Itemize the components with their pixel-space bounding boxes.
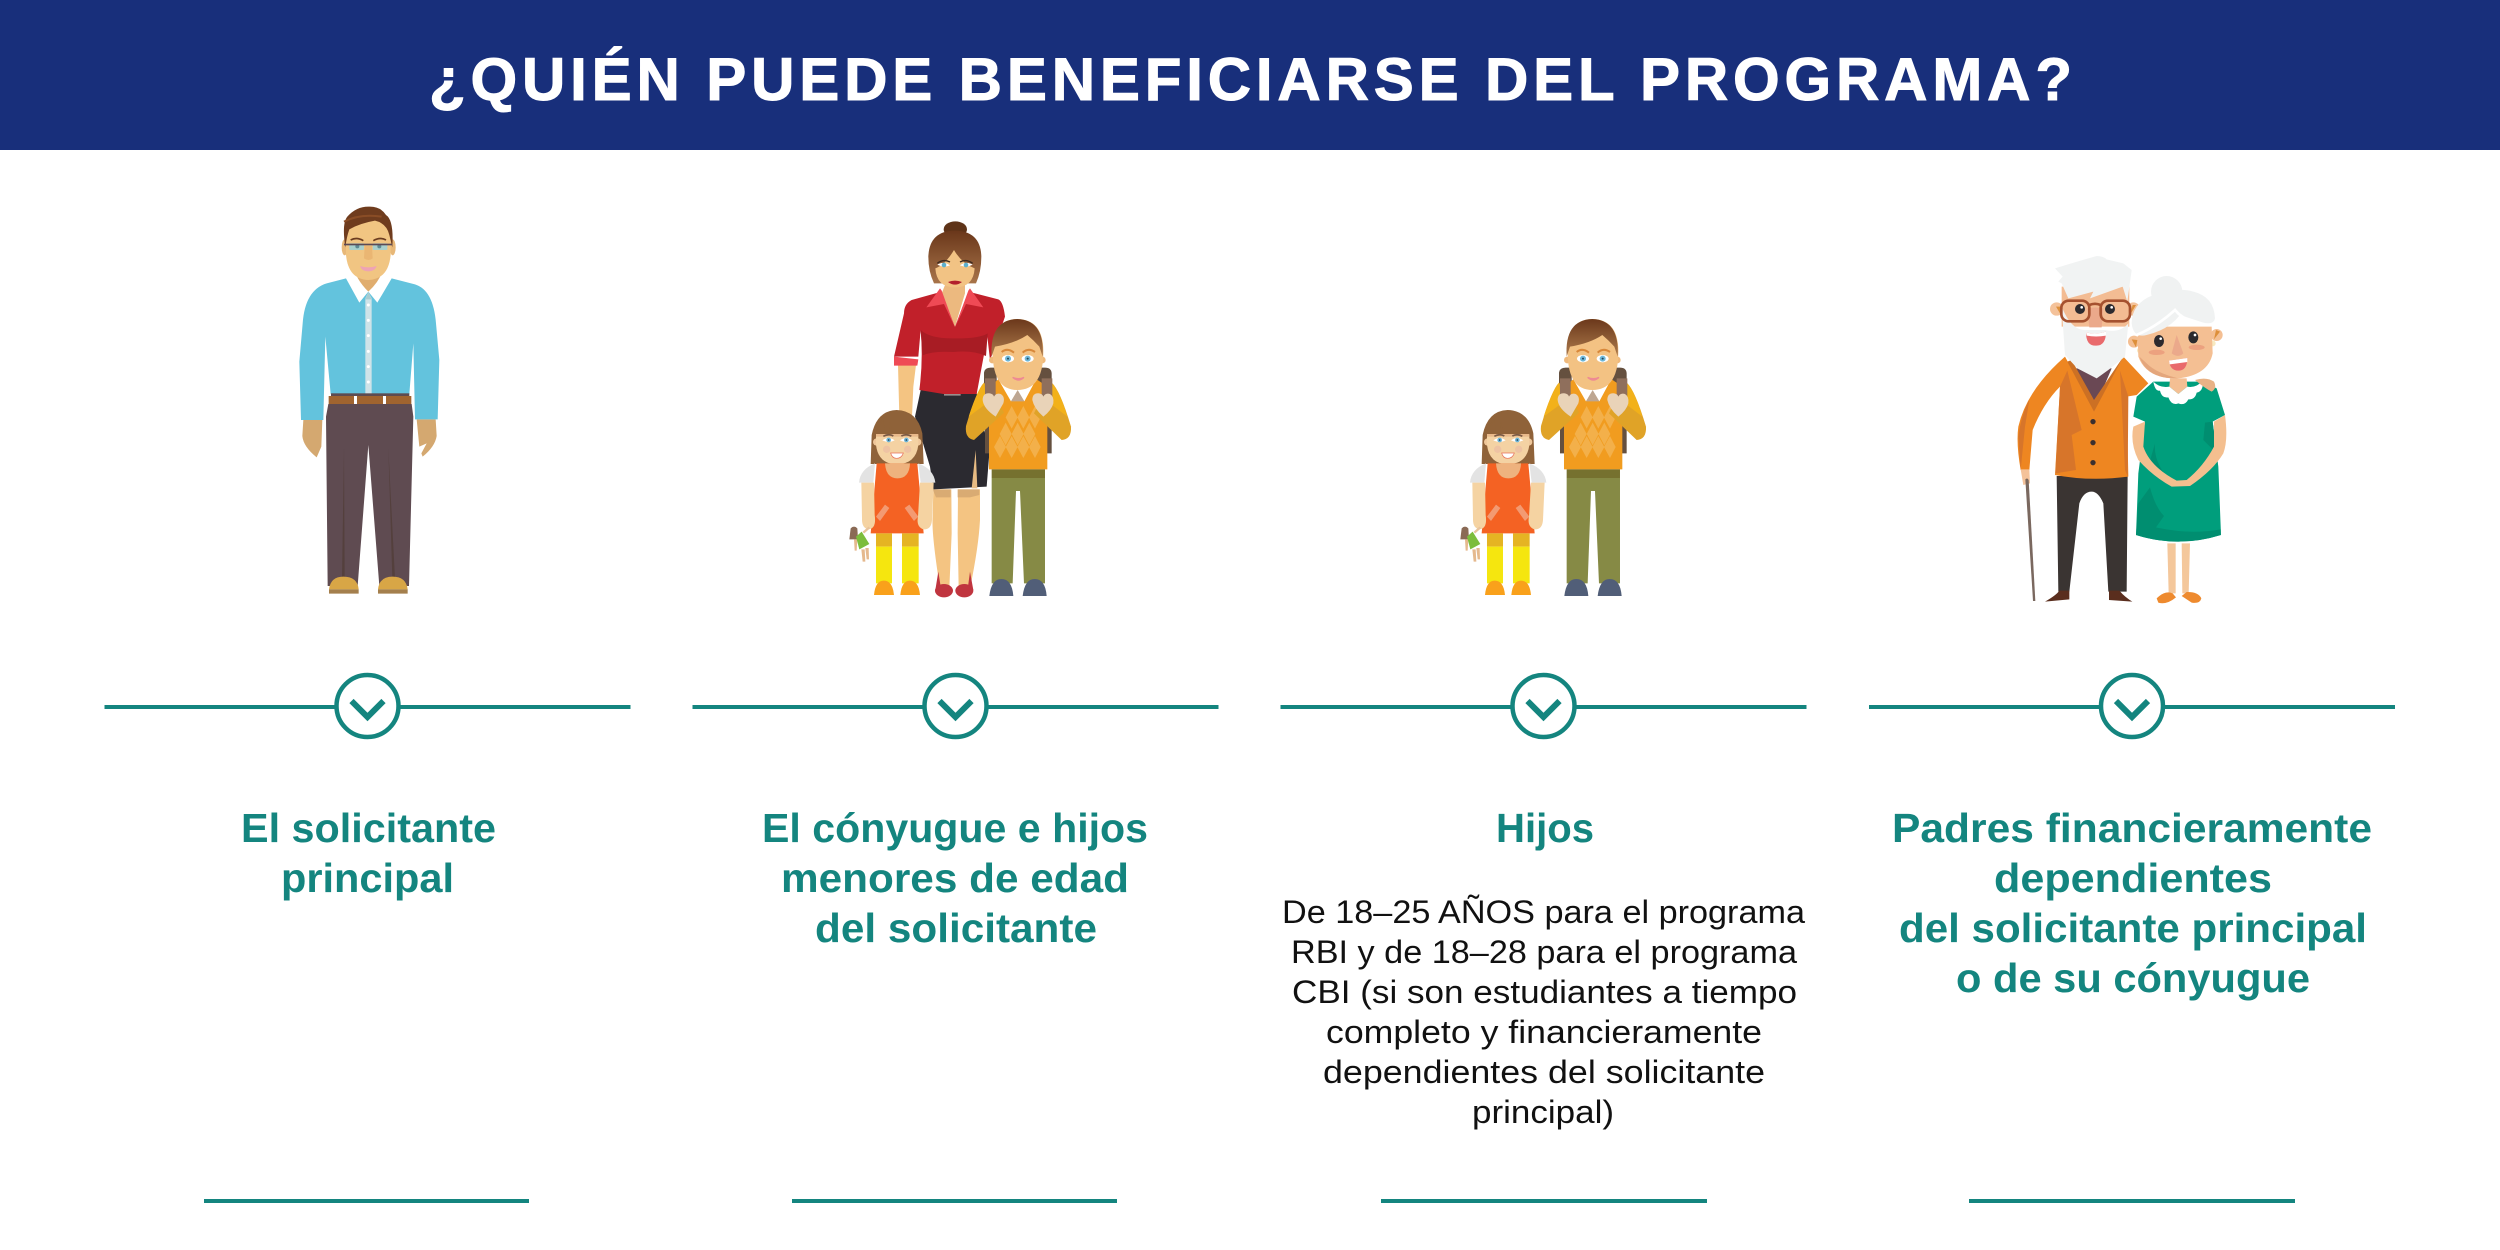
- heading: del solicitante principal: [1899, 905, 2367, 951]
- bottom rule: [1381, 1199, 1707, 1203]
- heading: [762, 805, 1148, 951]
- heading: [241, 805, 496, 901]
- heading: del solicitante: [815, 905, 1097, 951]
- heading: o de su cónyugue: [1956, 955, 2310, 1001]
- girl: [1460, 410, 1546, 595]
- grandfather: [2018, 256, 2148, 602]
- heading: Padres financieramente: [1892, 805, 2372, 851]
- title banner: [0, 0, 2500, 150]
- chevron divider: [692, 675, 1218, 737]
- description: principal): [1472, 1094, 1614, 1130]
- bottom rule: [1969, 1199, 2295, 1203]
- illustration: elderly couple: [2018, 256, 2226, 603]
- woman: [894, 221, 1005, 597]
- bottom rule: [792, 1199, 1117, 1203]
- heading: menores de edad: [781, 855, 1129, 901]
- heading: principal: [281, 855, 454, 901]
- heading: El solicitante: [241, 805, 496, 851]
- description: dependientes del solicitante: [1323, 1054, 1765, 1090]
- description: CBI (si son estudiantes a tiempo: [1292, 974, 1797, 1010]
- panel: hijos: [1280, 319, 1806, 1203]
- panel: el solicitante principal: [104, 207, 630, 1203]
- chevron divider: [1869, 675, 2395, 737]
- girl: [849, 410, 935, 595]
- boy: [966, 319, 1071, 596]
- title: ¿QUIÉN PUEDE BENEFICIARSE DEL PROGRAMA?: [429, 46, 2072, 113]
- description: De 18–25 AÑOS para el programa: [1282, 894, 1805, 930]
- description: completo y financieramente: [1326, 1014, 1762, 1050]
- heading: dependientes: [1994, 855, 2272, 901]
- bottom rule: [204, 1199, 529, 1203]
- illustration: mother with children: [849, 221, 1071, 597]
- description: [1282, 894, 1805, 1130]
- heading: El cónyugue e hijos: [762, 805, 1148, 851]
- boy: [1541, 319, 1646, 596]
- chevron divider: [104, 675, 630, 737]
- illustration: man: [299, 207, 439, 594]
- panel: el cónyugue e hijos: [692, 221, 1218, 1203]
- heading: Hijos: [1496, 805, 1594, 851]
- heading: [1892, 805, 2372, 1001]
- chevron divider: [1280, 675, 1806, 737]
- illustration: children: [1460, 319, 1646, 596]
- panel: padres: [1869, 256, 2395, 1203]
- description: RBI y de 18–28 para el programa: [1291, 934, 1797, 970]
- grandmother: [2128, 276, 2226, 603]
